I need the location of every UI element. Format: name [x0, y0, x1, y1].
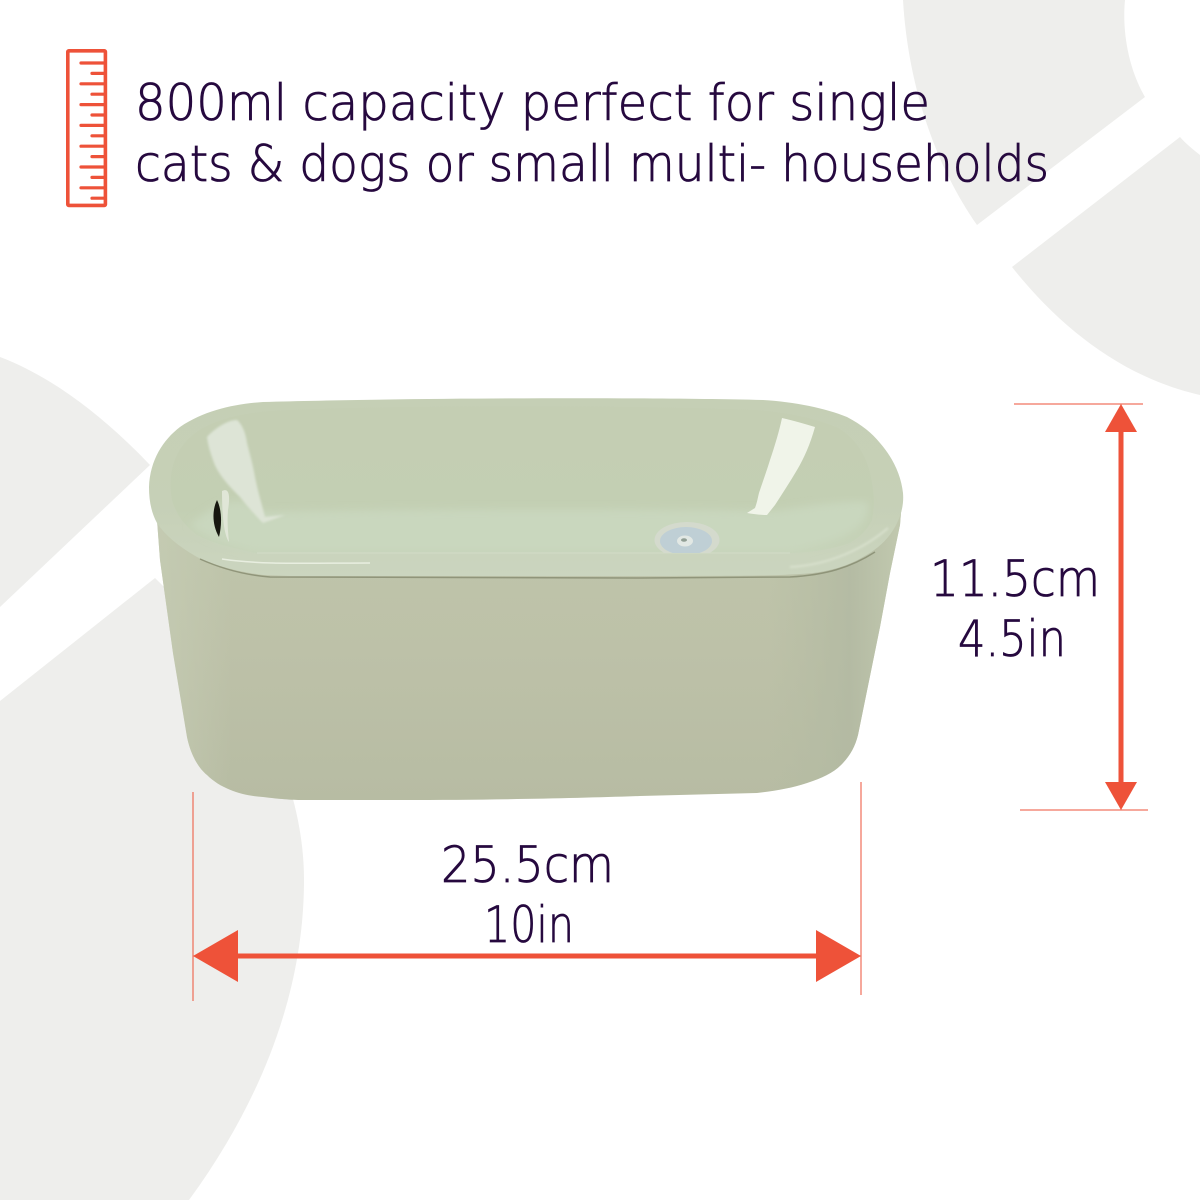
lid rim	[149, 398, 903, 576]
spout light edge	[222, 490, 229, 542]
basin floor	[190, 501, 868, 552]
inner lip line	[257, 552, 790, 554]
silicone plug	[654, 522, 720, 553]
width label	[441, 836, 614, 954]
body side shading	[157, 500, 902, 800]
lip specular line	[222, 559, 370, 563]
product: ceramic water fountain bowl	[149, 398, 903, 800]
heading text: 800ml capacity perfect for single	[135, 74, 930, 132]
inner basin	[171, 406, 874, 553]
lid shadow line	[200, 552, 875, 578]
bowl body	[157, 500, 902, 800]
height label: 11.5cm	[930, 550, 1100, 608]
width dimension arrow	[193, 782, 861, 1001]
height label: 4.5in	[958, 610, 1066, 668]
width label: 10in	[484, 896, 574, 954]
height label	[930, 550, 1100, 668]
icon: ruler	[68, 51, 105, 205]
right glare	[747, 418, 815, 515]
width label: 25.5cm	[441, 836, 614, 894]
left spout slot	[213, 500, 221, 537]
left glare	[207, 420, 285, 523]
height dimension arrow	[1014, 404, 1148, 810]
rim edge highlight	[790, 528, 888, 567]
heading text: cats & dogs or small multi- households	[135, 135, 1049, 193]
heading text	[135, 74, 1049, 193]
